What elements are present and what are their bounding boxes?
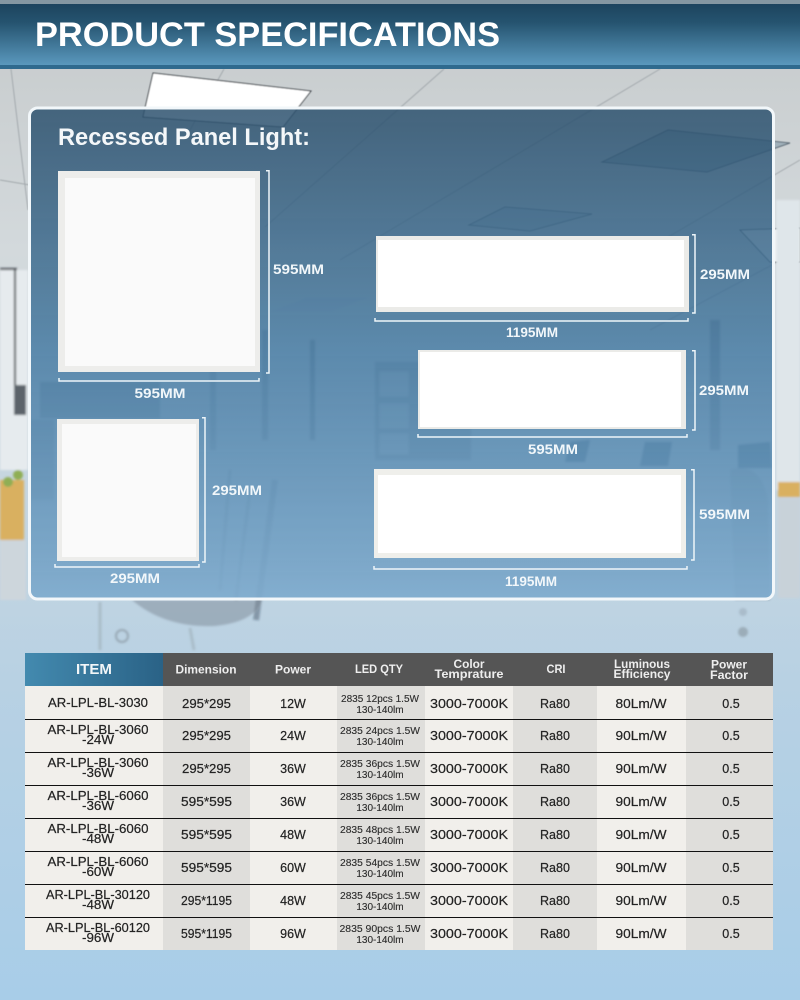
table header row: Power bbox=[711, 660, 748, 672]
row AR-LPL-BL-6060-48W: 0.5 bbox=[722, 828, 740, 842]
row AR-LPL-BL-30120-48W: 130-140lm bbox=[356, 902, 404, 913]
table header row bbox=[25, 653, 773, 686]
row AR-LPL-BL-3030: 12W bbox=[280, 697, 306, 711]
row AR-LPL-BL-6060-36W bbox=[48, 789, 740, 814]
row AR-LPL-BL-3060-24W: 0.5 bbox=[722, 729, 740, 743]
row AR-LPL-BL-60120-96W: 130-140lm bbox=[356, 935, 404, 946]
row AR-LPL-BL-3060-36W: -36W bbox=[82, 766, 114, 780]
table header row: CRI bbox=[546, 664, 566, 676]
panel light 595x1195 bbox=[374, 469, 750, 589]
panel light 595x1195: 1195MM bbox=[505, 573, 557, 589]
row AR-LPL-BL-6060-48W: 2835 48pcs 1.5W bbox=[340, 825, 421, 836]
row AR-LPL-BL-3030: 2835 12pcs 1.5W bbox=[341, 694, 420, 705]
row AR-LPL-BL-6060-60W: AR-LPL-BL-6060 bbox=[48, 855, 149, 869]
row AR-LPL-BL-30120-48W bbox=[46, 888, 740, 913]
row AR-LPL-BL-30120-48W: 90Lm/W bbox=[616, 894, 667, 908]
row AR-LPL-BL-3060-24W: 90Lm/W bbox=[616, 729, 667, 743]
row AR-LPL-BL-30120-48W: -48W bbox=[82, 898, 114, 912]
row AR-LPL-BL-3060-24W: AR-LPL-BL-3060 bbox=[48, 723, 149, 737]
row AR-LPL-BL-30120-48W: 3000-7000K bbox=[430, 894, 509, 908]
row AR-LPL-BL-3060-24W: 295*295 bbox=[182, 729, 231, 743]
row AR-LPL-BL-30120-48W: Ra80 bbox=[540, 894, 570, 908]
row AR-LPL-BL-3060-36W: 3000-7000K bbox=[430, 762, 509, 776]
panel light 595x595 bbox=[58, 171, 324, 401]
office chair below panel bbox=[100, 600, 262, 650]
row AR-LPL-BL-3060-24W: 2835 24pcs 1.5W bbox=[340, 726, 421, 737]
row AR-LPL-BL-6060-36W: 3000-7000K bbox=[430, 795, 509, 809]
row AR-LPL-BL-6060-36W: -36W bbox=[82, 799, 114, 813]
header banner bbox=[0, 0, 800, 69]
row AR-LPL-BL-6060-60W: 130-140lm bbox=[356, 869, 404, 880]
row AR-LPL-BL-3060-36W: Ra80 bbox=[540, 762, 570, 776]
row AR-LPL-BL-6060-48W: 90Lm/W bbox=[616, 828, 667, 842]
table header row: Luminous bbox=[614, 659, 670, 671]
table header row: Dimension bbox=[176, 664, 236, 676]
panel light 295x1195 bbox=[375, 235, 750, 340]
specifications table bbox=[25, 653, 773, 950]
row AR-LPL-BL-3060-36W: 295*295 bbox=[182, 762, 231, 776]
row AR-LPL-BL-6060-60W: 2835 54pcs 1.5W bbox=[340, 858, 421, 869]
heading: recessed panel light: Recessed Panel Light: bbox=[58, 124, 310, 151]
row AR-LPL-BL-6060-36W: 2835 36pcs 1.5W bbox=[340, 792, 421, 803]
row AR-LPL-BL-60120-96W bbox=[46, 921, 740, 946]
row AR-LPL-BL-3060-36W: 2835 36pcs 1.5W bbox=[340, 759, 421, 770]
table header row: Factor bbox=[710, 670, 749, 682]
row AR-LPL-BL-60120-96W: -96W bbox=[82, 931, 114, 945]
row AR-LPL-BL-3060-36W: AR-LPL-BL-3060 bbox=[48, 756, 149, 770]
row AR-LPL-BL-6060-36W: 0.5 bbox=[722, 795, 740, 809]
row AR-LPL-BL-60120-96W: 0.5 bbox=[722, 927, 740, 941]
row AR-LPL-BL-6060-60W: 595*595 bbox=[181, 861, 232, 875]
row AR-LPL-BL-3060-36W: 36W bbox=[280, 762, 306, 776]
row AR-LPL-BL-3030 bbox=[48, 694, 740, 716]
row AR-LPL-BL-3060-24W: Ra80 bbox=[540, 729, 570, 743]
panel light 595x595: 595MM bbox=[273, 261, 324, 277]
row AR-LPL-BL-3060-24W: 3000-7000K bbox=[430, 729, 509, 743]
row AR-LPL-BL-6060-36W: Ra80 bbox=[540, 795, 570, 809]
panel: recessed panel light bbox=[30, 108, 774, 599]
row AR-LPL-BL-3060-24W bbox=[48, 723, 740, 748]
row AR-LPL-BL-6060-48W: AR-LPL-BL-6060 bbox=[48, 822, 149, 836]
row AR-LPL-BL-6060-60W: 90Lm/W bbox=[616, 861, 667, 875]
row AR-LPL-BL-3030: 0.5 bbox=[722, 697, 740, 711]
row AR-LPL-BL-6060-48W: Ra80 bbox=[540, 828, 570, 842]
row AR-LPL-BL-30120-48W: AR-LPL-BL-30120 bbox=[46, 888, 150, 902]
row AR-LPL-BL-6060-48W: 130-140lm bbox=[356, 836, 404, 847]
row AR-LPL-BL-6060-36W: 130-140lm bbox=[356, 803, 404, 814]
row AR-LPL-BL-3060-36W: 0.5 bbox=[722, 762, 740, 776]
table header row: Power bbox=[275, 664, 312, 676]
row AR-LPL-BL-3030: Ra80 bbox=[540, 697, 570, 711]
row AR-LPL-BL-30120-48W: 0.5 bbox=[722, 894, 740, 908]
row AR-LPL-BL-3060-36W: 90Lm/W bbox=[616, 762, 667, 776]
row AR-LPL-BL-6060-36W: 595*595 bbox=[181, 795, 232, 809]
row AR-LPL-BL-6060-48W bbox=[48, 822, 740, 847]
row AR-LPL-BL-3030: 3000-7000K bbox=[430, 697, 509, 711]
row AR-LPL-BL-6060-36W: 90Lm/W bbox=[616, 795, 667, 809]
panel light 295x295 bbox=[55, 418, 262, 586]
panel light 295x1195: 295MM bbox=[700, 266, 750, 282]
row AR-LPL-BL-6060-48W: -48W bbox=[82, 832, 114, 846]
row AR-LPL-BL-60120-96W: AR-LPL-BL-60120 bbox=[46, 921, 150, 935]
panel light 295x1195: 1195MM bbox=[506, 324, 558, 340]
row AR-LPL-BL-60120-96W: 90Lm/W bbox=[616, 927, 667, 941]
table header row: LED QTY bbox=[355, 664, 403, 676]
row AR-LPL-BL-60120-96W: 2835 90pcs 1.5W bbox=[340, 924, 421, 935]
row AR-LPL-BL-6060-48W: 3000-7000K bbox=[430, 828, 509, 842]
row AR-LPL-BL-3060-36W: 130-140lm bbox=[356, 770, 404, 781]
table header row: Efficiency bbox=[614, 669, 671, 681]
row AR-LPL-BL-6060-60W: 0.5 bbox=[722, 861, 740, 875]
row AR-LPL-BL-3030: AR-LPL-BL-3030 bbox=[48, 696, 148, 710]
table header row: ITEM bbox=[76, 661, 112, 678]
row AR-LPL-BL-60120-96W: 96W bbox=[280, 927, 306, 941]
row AR-LPL-BL-3030: 295*295 bbox=[182, 697, 231, 711]
row AR-LPL-BL-60120-96W: 595*1195 bbox=[181, 927, 232, 941]
table header row: Color bbox=[454, 659, 485, 671]
row AR-LPL-BL-6060-60W bbox=[48, 855, 740, 880]
row AR-LPL-BL-30120-48W: 295*1195 bbox=[181, 894, 232, 908]
row AR-LPL-BL-6060-60W: Ra80 bbox=[540, 861, 570, 875]
row AR-LPL-BL-30120-48W: 2835 45pcs 1.5W bbox=[340, 891, 421, 902]
row AR-LPL-BL-6060-60W: 3000-7000K bbox=[430, 861, 509, 875]
panel light 595x595: 595MM bbox=[134, 385, 186, 401]
panel light 295x295: 295MM bbox=[110, 570, 160, 586]
row AR-LPL-BL-3060-24W: 130-140lm bbox=[356, 737, 404, 748]
panel light 295x595: 295MM bbox=[699, 382, 749, 398]
table header row: Temprature bbox=[434, 669, 504, 681]
row AR-LPL-BL-6060-48W: 595*595 bbox=[181, 828, 232, 842]
panel light 595x1195: 595MM bbox=[699, 506, 750, 522]
panel light 295x595 bbox=[418, 350, 749, 457]
title: PRODUCT SPECIFICATIONS bbox=[35, 16, 500, 54]
row AR-LPL-BL-3030: 130-140lm bbox=[356, 705, 404, 716]
row AR-LPL-BL-6060-36W: 36W bbox=[280, 795, 306, 809]
row AR-LPL-BL-3060-24W: 24W bbox=[280, 729, 306, 743]
row AR-LPL-BL-3060-24W: -24W bbox=[82, 733, 114, 747]
panel light 295x295: 295MM bbox=[212, 482, 262, 498]
row AR-LPL-BL-30120-48W: 48W bbox=[280, 894, 306, 908]
row AR-LPL-BL-60120-96W: Ra80 bbox=[540, 927, 570, 941]
row AR-LPL-BL-6060-48W: 48W bbox=[280, 828, 306, 842]
row AR-LPL-BL-3060-36W bbox=[48, 756, 740, 781]
row AR-LPL-BL-3030: 80Lm/W bbox=[616, 697, 667, 711]
row AR-LPL-BL-6060-60W: -60W bbox=[82, 865, 114, 879]
row AR-LPL-BL-6060-36W: AR-LPL-BL-6060 bbox=[48, 789, 149, 803]
row AR-LPL-BL-60120-96W: 3000-7000K bbox=[430, 927, 509, 941]
panel light 295x595: 595MM bbox=[528, 441, 578, 457]
table column shading bbox=[25, 686, 773, 950]
row AR-LPL-BL-6060-60W: 60W bbox=[280, 861, 306, 875]
